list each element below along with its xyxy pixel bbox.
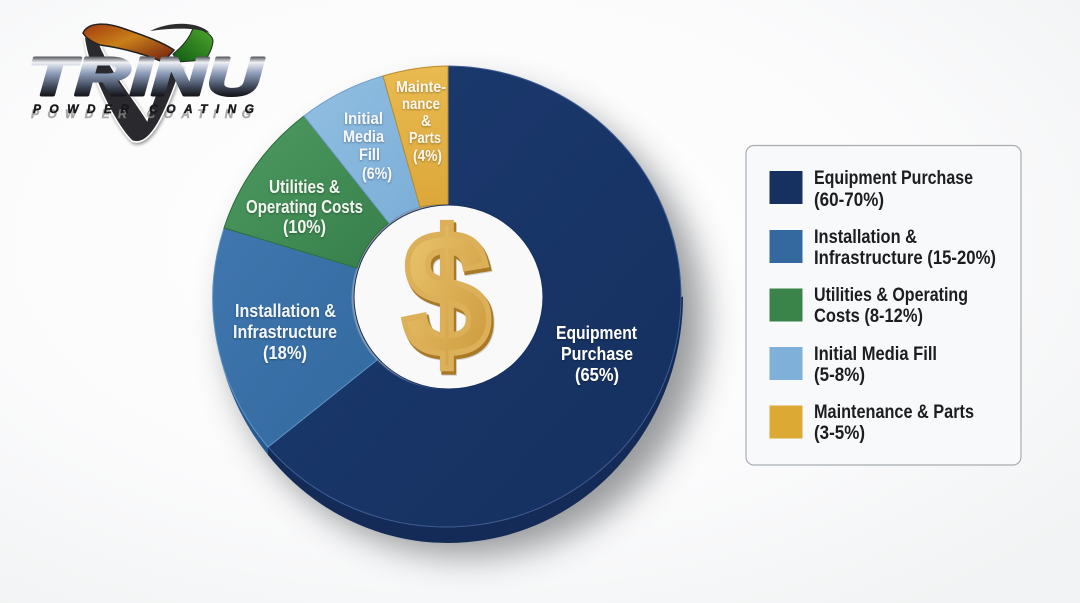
label: Maintenance & Parts: (4%) [413,148,442,165]
label: Equipment Purchase: Equipment [556,323,637,343]
slice: Equipment Purchase [268,66,681,527]
label: Maintenance & Parts [396,79,446,165]
pie chart [213,66,683,543]
slice: Installation & Infrastructure [213,228,377,447]
legend item: Maintenance & Parts: (3-5%) [814,423,865,444]
logo: Trinu Powder Coating [28,24,265,142]
pie side wall: navy [268,296,683,543]
logo: green band [173,28,213,62]
legend item: Installation & Infrastructure: Infrastructure (15-20%) [814,248,996,269]
logo: TRINU wordmark: TRINU [28,47,265,107]
legend item: Equipment Purchase: (60-70%) [814,190,884,211]
label: Utilities & Operating Costs: Utilities & [269,177,340,197]
label: Initial Media Fill: Initial [344,109,383,128]
legend item: Initial Media Fill: Initial Media Fill [814,344,937,365]
logo: dark top swoosh [150,24,210,33]
logo: black lower ring [84,36,182,142]
label: Installation & Infrastructure [233,301,337,363]
label: Initial Media Fill: Media [343,127,384,146]
slice: Maintenance & Parts [383,66,448,207]
label: Installation & Infrastructure: Installation & [235,301,336,321]
legend item: Installation & Infrastructure: Installation & [814,227,917,248]
label: Initial Media Fill: Fill [359,145,380,164]
label: Equipment Purchase: (65%) [575,365,619,385]
logo: red band [83,24,174,62]
legend item: Utilities & Operating Costs: Utilities & Operating [814,285,968,306]
icon: gold dollar sign: $ [404,197,493,396]
legend box [746,146,1021,465]
legend item: Equipment Purchase [770,168,973,211]
label: Equipment Purchase: Purchase [561,344,633,364]
label: Utilities & Operating Costs: Operating Costs [246,197,363,217]
icon: gold dollar sign: $ [405,198,494,397]
label: Utilities & Operating Costs: (10%) [283,217,326,237]
legend item: Maintenance & Parts [770,402,974,444]
legend item: Initial Media Fill [770,344,937,386]
label: Utilities & Operating Costs [246,177,363,237]
legend item: Utilities & Operating Costs [770,285,968,327]
center hole [354,205,543,389]
label: Equipment Purchase [556,323,637,385]
slice: Utilities & Operating Costs [224,116,389,268]
label: Maintenance & Parts: nance [402,96,440,113]
logo: tagline reflection: POWDER COATING [31,107,251,121]
legend item: Utilities & Operating Costs: Costs (8-12%) [814,306,923,327]
label: Initial Media Fill: (6%) [362,164,392,183]
pie side wall: blue [213,296,268,455]
label: Initial Media Fill [343,109,392,183]
legend item: Maintenance & Parts: Maintenance & Parts [814,402,974,423]
label: Installation & Infrastructure: Infrastructure [233,322,337,342]
label: Maintenance & Parts: Parts [409,130,441,147]
icon: gold dollar sign: $ [402,194,491,393]
legend panel [746,146,1021,465]
logo: tagline: POWDER COATING [33,102,254,116]
drop shadow under pie [228,88,704,556]
legend item: Initial Media Fill: (5-8%) [814,365,865,386]
slice: Initial Media Fill [304,76,420,223]
label: Installation & Infrastructure: (18%) [263,343,307,363]
legend item: Equipment Purchase: Equipment Purchase [814,168,973,189]
label: Maintenance & Parts: & [421,113,431,130]
label: Maintenance & Parts: Mainte- [396,79,446,96]
legend item: Installation & Infrastructure [770,227,996,269]
